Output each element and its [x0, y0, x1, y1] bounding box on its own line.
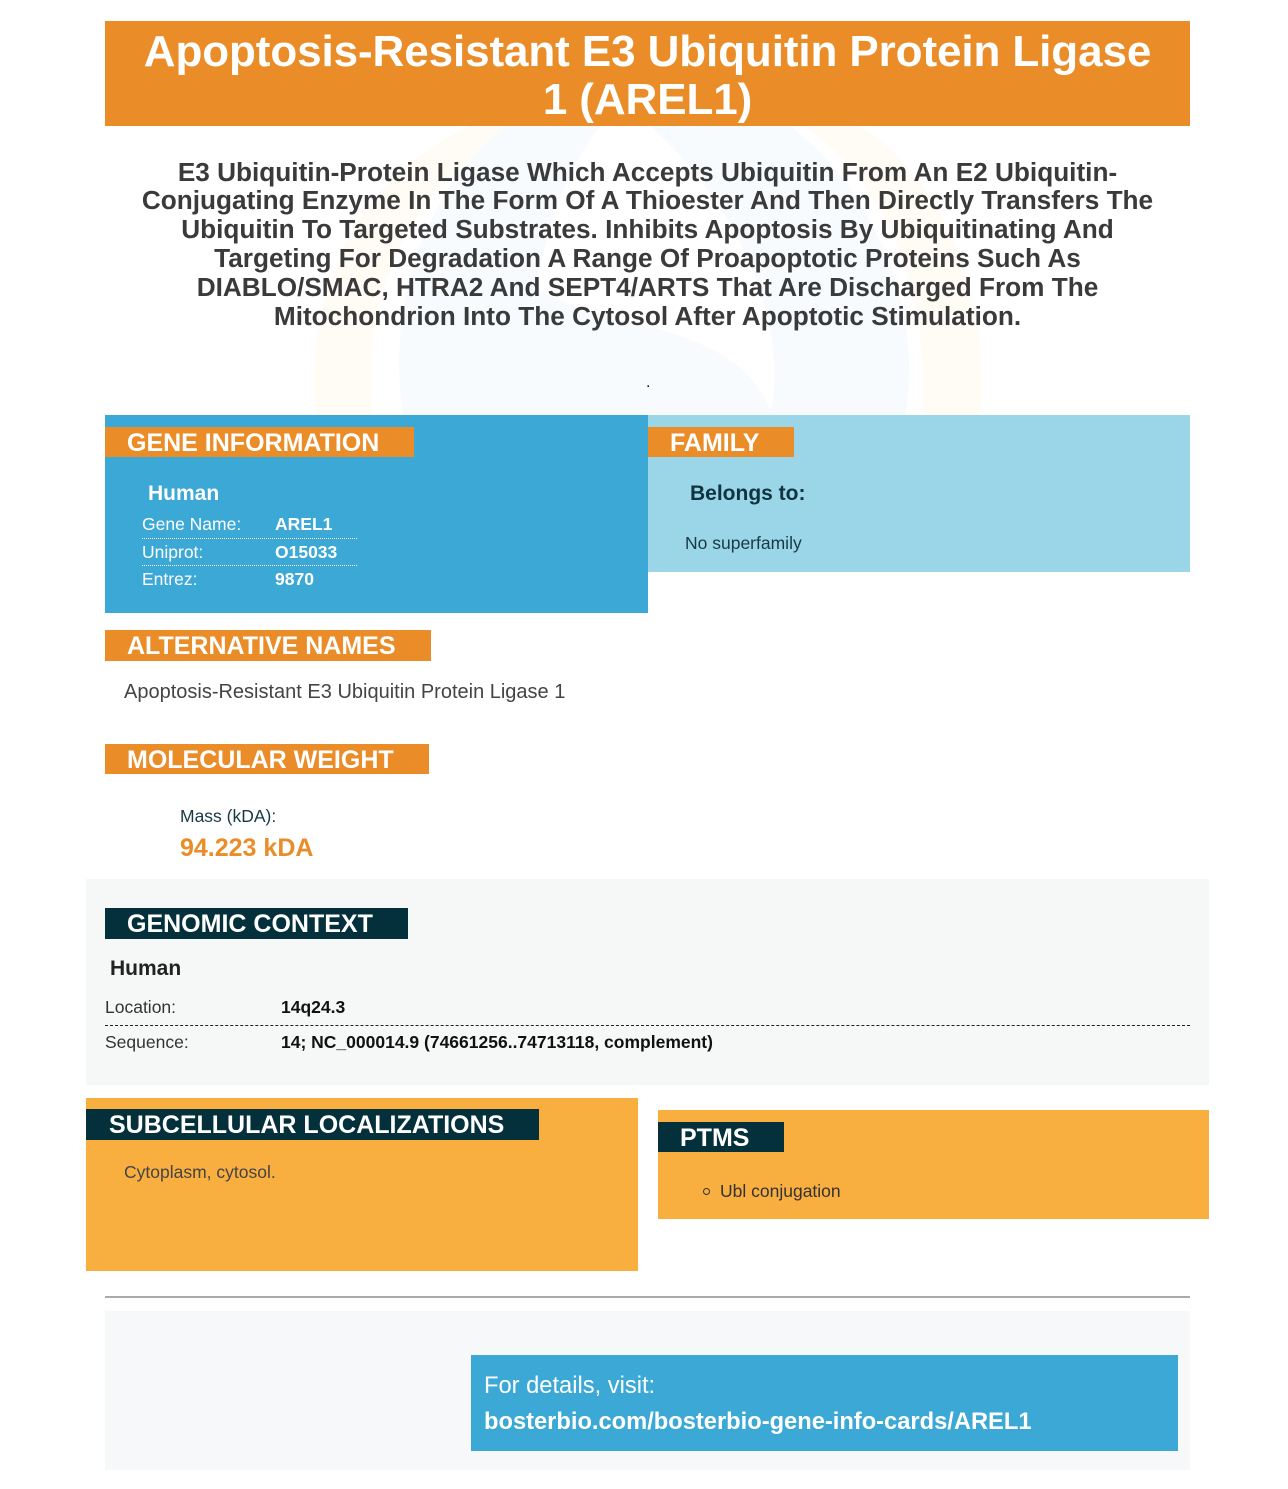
panel: subcellular localizations: [86, 1098, 638, 1271]
species label: Human: [148, 482, 219, 505]
species label: Human: [110, 957, 181, 980]
callout: details link: [471, 1355, 1178, 1451]
localization text: Cytoplasm, cytosol.: [124, 1162, 276, 1182]
alternative names text: Apoptosis-Resistant E3 Ubiquitin Protein Ligase 1: [124, 681, 565, 703]
background watermark logo: [314, 126, 982, 415]
heading: ptms: [658, 1122, 784, 1152]
panel: footer: [105, 1311, 1190, 1470]
heading: subcellular localizations: SUBCELLULAR LOCALIZATIONS: [109, 1111, 504, 1139]
panel: genomic context: [86, 879, 1209, 1085]
title banner: [105, 21, 1190, 126]
row: location: 14q24.3: [281, 997, 345, 1017]
row: entrez: Entrez:: [142, 569, 197, 589]
bullet: [703, 1188, 710, 1195]
mass value: 94.223 kDA: [180, 834, 313, 862]
mass label: Mass (kDA):: [180, 806, 276, 826]
description: [142, 157, 1153, 331]
heading: family: [648, 427, 794, 457]
heading: gene information: GENE INFORMATION: [127, 429, 379, 457]
row: gene name: Gene Name:: [142, 514, 241, 534]
heading: family: FAMILY: [670, 429, 759, 457]
row: location: [105, 995, 1190, 1026]
callout url: bosterbio.com/bosterbio-gene-info-cards/AREL1: [484, 1409, 1032, 1435]
panel: ptms: [658, 1110, 1209, 1219]
row: location: Location:: [105, 997, 176, 1017]
description: DIABLO/SMAC, HTRA2 And SEPT4/ARTS That Are Discharged From The: [197, 272, 1098, 302]
heading: alternative names: ALTERNATIVE NAMES: [127, 632, 396, 660]
superfamily text: No superfamily: [685, 533, 802, 553]
description: Conjugating Enzyme In The Form Of A Thioester And Then Directly Transfers The: [142, 185, 1153, 215]
heading: molecular weight: MOLECULAR WEIGHT: [127, 746, 394, 774]
description: E3 Ubiquitin-Protein Ligase Which Accepts Ubiquitin From An E2 Ubiquitin-: [178, 157, 1117, 187]
row: sequence: 14; NC_000014.9 (74661256..74713118, complement): [281, 1032, 713, 1052]
row: sequence: Sequence:: [105, 1032, 189, 1052]
row: entrez: [142, 569, 314, 589]
title line 2: 1 (AREL1): [543, 75, 752, 124]
row: gene name: [142, 513, 357, 539]
title line 1: Apoptosis-Resistant E3 Ubiquitin Protein Ligase: [144, 27, 1151, 76]
panel: gene information: [105, 415, 648, 613]
description: Mitochondrion Into The Cytosol After Apoptotic Stimulation.: [274, 301, 1021, 331]
panel: family: [648, 415, 1190, 572]
row: entrez: 9870: [275, 569, 314, 589]
ptm item: Ubl conjugation: [720, 1181, 841, 1201]
dot: .: [646, 374, 650, 391]
row: uniprot: Uniprot:: [142, 542, 203, 562]
description: Ubiquitin To Targeted Substrates. Inhibits Apoptosis By Ubiquitinating And: [181, 214, 1114, 244]
row: gene name: AREL1: [275, 514, 332, 534]
row: uniprot: [142, 541, 357, 566]
heading: genomic context: GENOMIC CONTEXT: [127, 910, 373, 938]
belongs to label: Belongs to:: [690, 482, 806, 505]
description: Targeting For Degradation A Range Of Proapoptotic Proteins Such As: [214, 243, 1081, 273]
callout label: For details, visit:: [484, 1373, 655, 1399]
heading: ptms: PTMS: [680, 1124, 749, 1152]
row: uniprot: O15033: [275, 542, 337, 562]
